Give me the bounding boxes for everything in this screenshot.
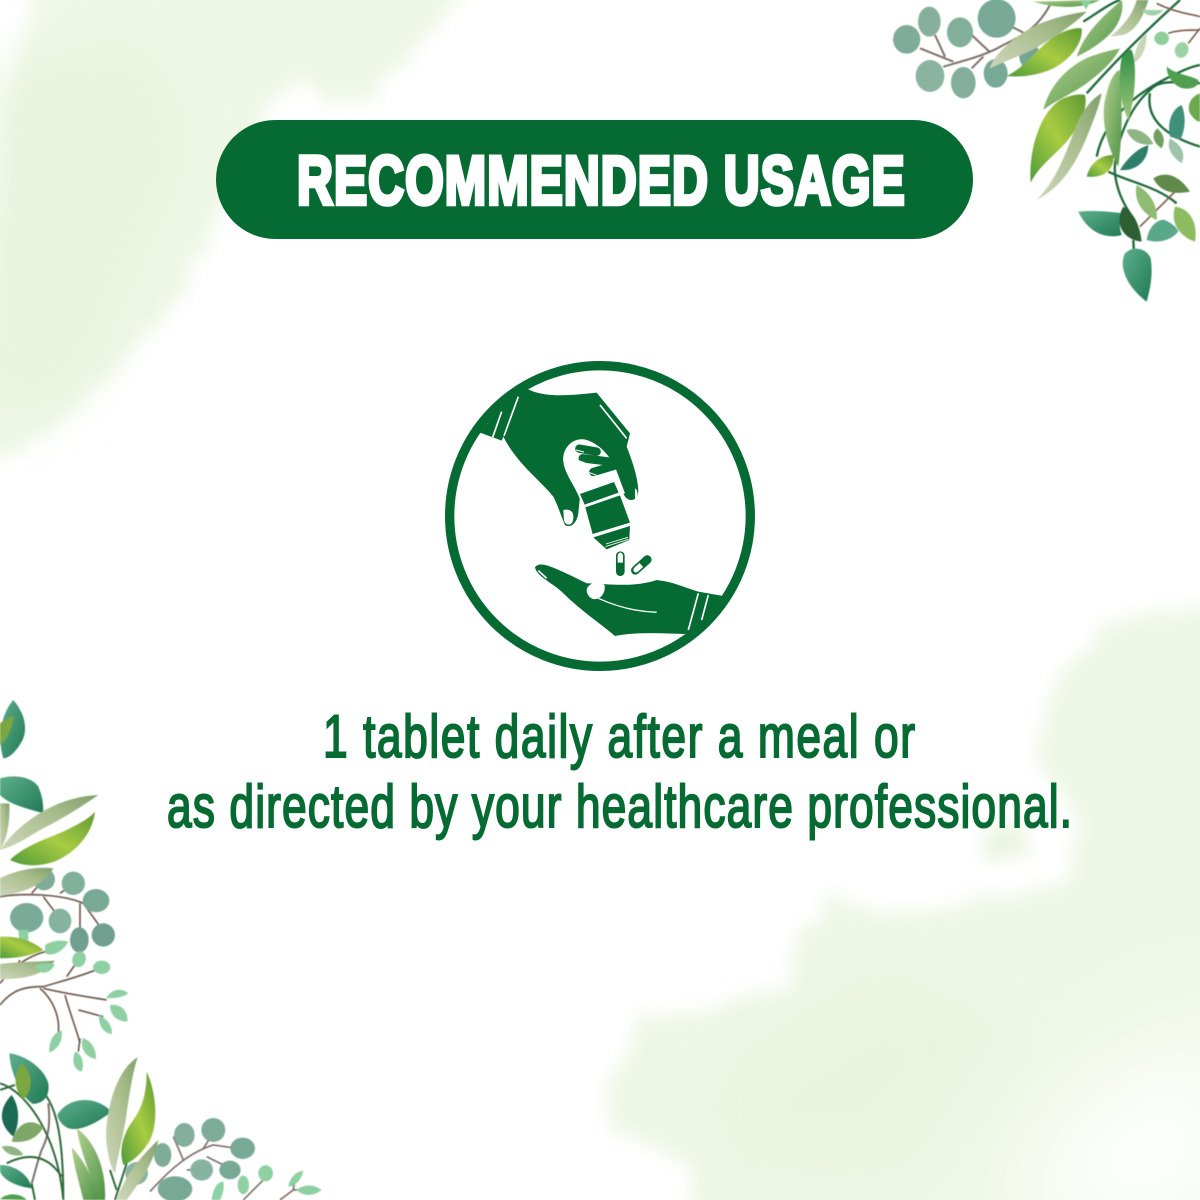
lower hand [535,565,723,636]
foliage: bottom left corner [0,700,322,1200]
eucalyptus sprig upper [10,868,115,953]
title text: RECOMMENDED USAGE [297,142,905,219]
foliage: top right corner [893,0,1200,302]
eucalyptus sprig [893,0,1050,98]
leaves lower [0,1053,158,1200]
eucalyptus sprig lower [125,1118,322,1200]
pill bottle [580,482,630,549]
line 2: as directed by your healthcare professional. [167,774,1072,841]
leaves [990,0,1200,302]
title pill [216,120,973,239]
stems and twigs [0,880,107,1052]
green stems [1083,0,1200,253]
upper hand [480,386,638,526]
icon ring [450,366,750,666]
usage instruction text [167,704,1072,841]
watercolor wash: bottom right [608,600,1200,1200]
capsules [616,551,653,576]
leaves upper [0,700,128,1072]
line 1: 1 tablet daily after a meal or [323,704,915,771]
watercolor wash: top left [0,0,460,475]
icon: hands dispensing capsules from a bottle [450,366,750,666]
